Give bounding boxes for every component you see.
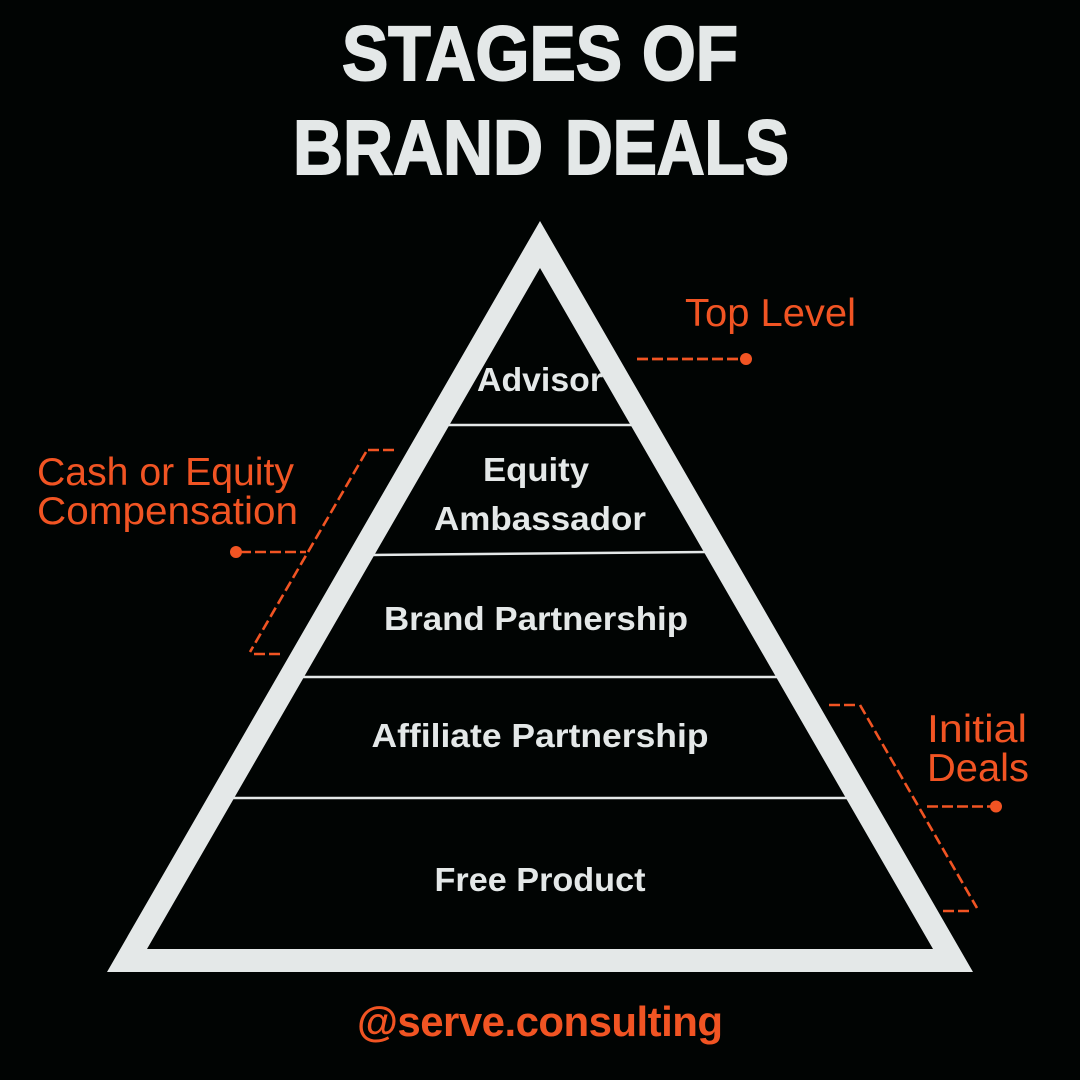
title: BRAND (293, 105, 543, 191)
callout: top level (637, 292, 856, 365)
callout: cash or equity compensation: Compensation (37, 490, 298, 533)
callout: cash or equity compensation (37, 450, 394, 654)
tier labels (372, 361, 708, 898)
callout: initial deals: Deals (927, 747, 1029, 790)
tier labels: Advisor (477, 361, 603, 398)
tier labels: Affiliate Partnership (372, 717, 708, 754)
tier labels: Free Product (434, 861, 646, 898)
footer handle: @serve.consulting (357, 998, 723, 1045)
pyramid outline (107, 221, 973, 972)
callout: initial deals: Initial (927, 708, 1027, 751)
callout: cash or equity compensation: Cash or Equity (37, 451, 294, 494)
title (293, 11, 789, 191)
tier labels: Brand Partnership (384, 600, 688, 637)
tier labels: Ambassador (434, 500, 646, 537)
tier dividers (233, 425, 848, 798)
callout: top level: Top Level (685, 292, 856, 335)
tier labels: Equity (483, 451, 590, 488)
callout: initial deals (829, 705, 1029, 911)
title: OF (642, 11, 738, 97)
title: STAGES (342, 11, 622, 97)
title: DEALS (565, 105, 789, 191)
